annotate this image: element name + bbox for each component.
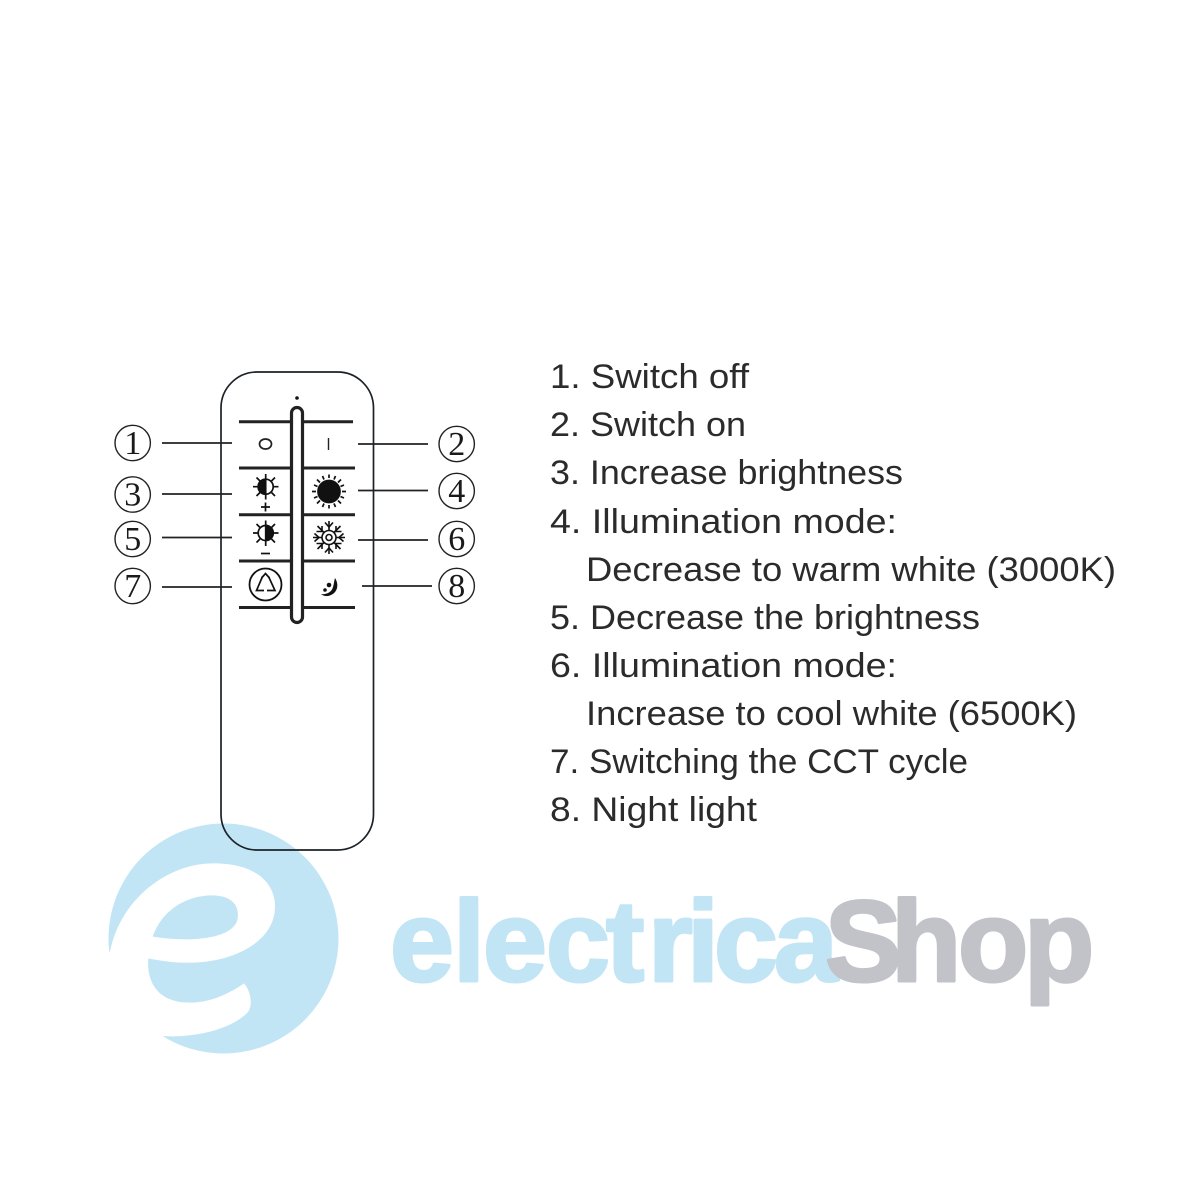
callout 4	[358, 473, 474, 510]
indicator dot	[295, 396, 299, 400]
centre slot	[292, 408, 302, 622]
function list: 7. Switching the CCT cycle	[550, 743, 968, 781]
function list: 3. Increase brightness	[550, 454, 903, 492]
callout 1	[115, 425, 232, 462]
callout 8	[362, 568, 474, 605]
callout 1: 1	[124, 425, 141, 462]
function list: 6. Illumination mode:	[550, 647, 897, 685]
callout 7: 7	[124, 568, 141, 605]
callout 7	[115, 568, 232, 605]
icon: night light moon	[321, 578, 337, 596]
icon: CCT cycle	[250, 568, 282, 600]
callout 3	[115, 476, 232, 514]
callout 4: 4	[448, 473, 465, 510]
callout 5: 5	[124, 521, 141, 558]
function list: Increase to cool white (6500K)	[586, 695, 1077, 733]
button divider bars	[239, 422, 355, 608]
function list: Decrease to warm white (3000K)	[586, 551, 1116, 589]
callout 5	[115, 521, 232, 558]
function list: 5. Decrease the brightness	[550, 599, 980, 637]
function list: 1. Switch off	[550, 358, 750, 396]
callout numbers and leader lines	[115, 425, 474, 605]
icon: on	[328, 438, 330, 450]
icon: warm white sun	[312, 474, 346, 508]
icon: decrease brightness	[253, 520, 278, 554]
callout 6	[358, 521, 474, 558]
function list: 2. Switch on	[550, 406, 746, 444]
icon: increase brightness	[253, 474, 278, 512]
callout 8: 8	[448, 568, 465, 605]
remote control	[221, 372, 374, 850]
function list: 8. Night light	[550, 791, 758, 829]
logo wordmark	[390, 878, 1094, 1006]
function list	[550, 358, 1116, 829]
logo emblem: blue circle with white e	[90, 824, 338, 1054]
icon: cool white snowflake	[313, 521, 345, 554]
callout 6: 6	[448, 521, 465, 558]
icon: off	[260, 439, 272, 449]
remote body	[221, 372, 374, 850]
logo wordmark: Shop	[825, 878, 1094, 1006]
callout 3: 3	[124, 476, 141, 514]
logo wordmark: electrica	[390, 878, 839, 1006]
function list: 4. Illumination mode:	[550, 503, 897, 541]
callout 2: 2	[448, 426, 465, 463]
watermark logo	[90, 824, 1094, 1054]
callout 2	[358, 426, 474, 463]
